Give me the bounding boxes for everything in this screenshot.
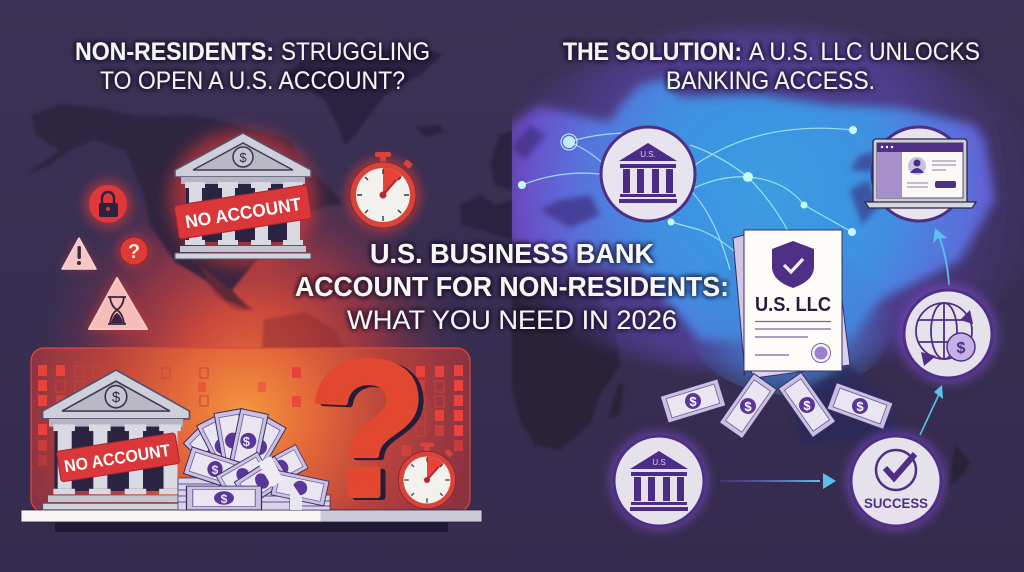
document: U.S. LLC [733,230,850,378]
arrow: success to globe [920,385,943,435]
money pile: $ [221,492,228,506]
globe circle: $ [957,340,966,357]
stopwatch [345,152,421,233]
banner: no account [56,433,180,482]
shelf [21,510,482,532]
success circle: SUCCESS [864,495,928,511]
blue glow and Eurasia map [470,30,1024,488]
bank on shelf: $ [112,389,121,406]
icon: lock [83,179,133,229]
network lines [522,128,853,270]
globe circle [898,284,998,384]
data grid squares [38,365,463,466]
panel: problem scene [31,348,470,512]
money pile: $ [212,463,219,477]
stopwatch on shelf [398,443,456,509]
heading: main title: WHAT YOU NEED IN 2026 [347,305,677,335]
bank with no account banner [169,130,317,266]
document: U.S. LLC: U.S. LLC [755,294,831,316]
icon: question circle [117,234,151,268]
heading: solution: A U.S. LLC UNLOCKS [749,38,980,66]
bank on shelf [43,370,189,510]
bank with no account banner: $ [239,150,247,165]
flying dollar bills [660,372,893,439]
flying dollar bills: $ [689,394,697,409]
heading: solution: THE SOLUTION: [563,38,742,66]
flying dollar bills: $ [803,398,811,413]
heading: problem: TO OPEN A U.S. ACCOUNT? [100,67,405,95]
icon: question circle: ? [128,241,140,263]
banner: no account [174,185,312,239]
heading: main title: U.S. BUSINESS BANK [370,238,654,269]
heading: problem: NON-RESIDENTS: [75,38,274,66]
icon: shield [772,241,814,288]
banner: no account: NO ACCOUNT [63,441,172,476]
lower U.S. bank circle: U.S [652,458,666,467]
heading: main title: ACCOUNT FOR NON-RESIDENTS: [295,271,729,302]
arrow: bank to success [720,473,836,489]
flying dollar bills: $ [744,399,752,414]
heading: main title [295,238,729,335]
big question mark: ? [314,323,432,538]
money pile: $ [243,434,251,449]
heading: solution [563,38,980,95]
red glow behind problem scene [54,194,446,348]
U.S. bank circle: U.S. [640,150,656,159]
flying dollar bills: $ [856,399,864,414]
heading: solution: BANKING ACCESS. [666,67,875,95]
arrow: globe to laptop [933,228,949,285]
money pile [178,409,330,510]
network nodes [518,126,857,236]
icon: warning triangle [62,238,96,269]
world map: dark landmasses [25,50,624,450]
heading: problem: STRUGGLING [281,38,430,66]
laptop circle [865,127,976,221]
U.S. bank circle [601,127,695,221]
banner: no account: NO ACCOUNT [184,194,303,232]
lower U.S. bank circle [609,431,709,531]
icon: hourglass triangle [88,276,148,330]
heading: problem [75,38,430,95]
success circle [846,431,946,531]
big question mark: ? [309,321,427,536]
